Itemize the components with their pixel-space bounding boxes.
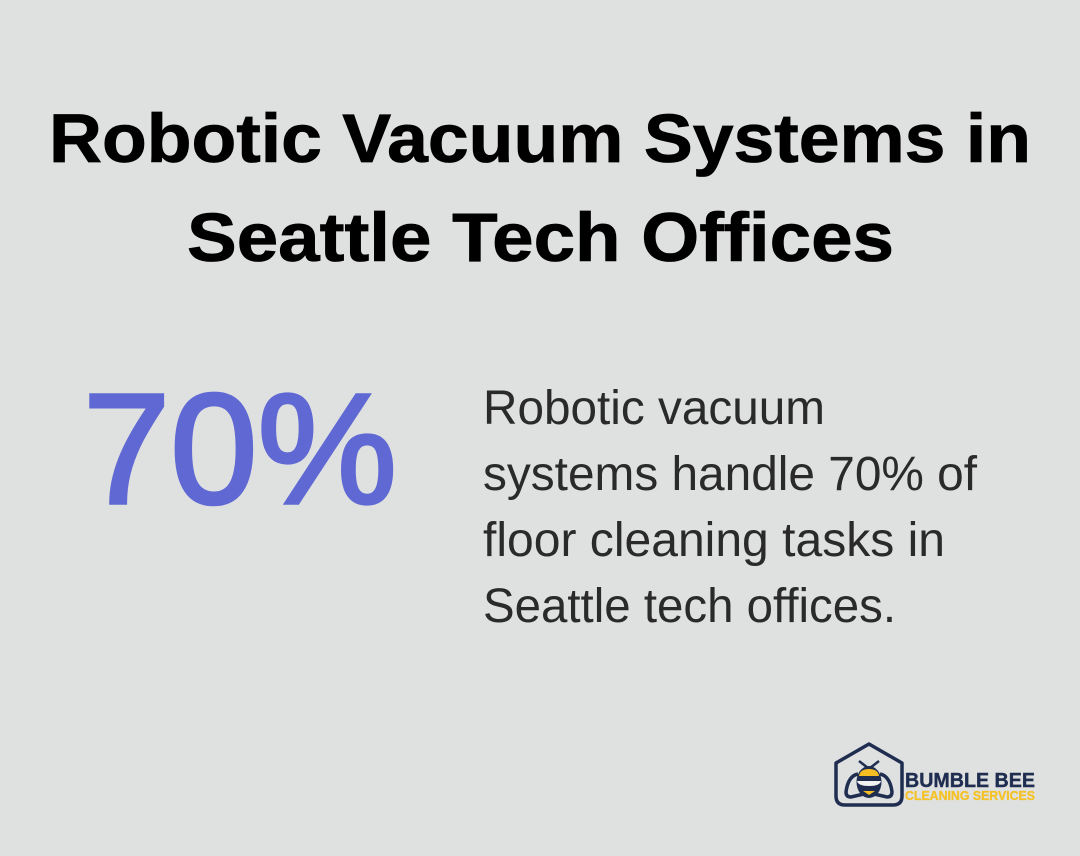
- description text: [483, 382, 978, 633]
- title: [49, 100, 1031, 276]
- big statistic: 70%: 70%: [83, 362, 397, 537]
- description text: systems handle 70% of: [483, 448, 978, 501]
- logo tagline: CLEANING SERVICES: [905, 789, 1035, 803]
- description text: floor cleaning tasks in: [483, 514, 945, 567]
- icon: house outline with bee: [836, 744, 902, 805]
- logo: Bumble Bee Cleaning Services: [836, 744, 1035, 805]
- title: Robotic Vacuum Systems in: [49, 100, 1031, 177]
- description text: Seattle tech offices.: [483, 580, 896, 633]
- title: Seattle Tech Offices: [187, 199, 894, 276]
- description text: Robotic vacuum: [483, 382, 825, 435]
- logo wordmark: BUMBLE BEE: [905, 769, 1035, 792]
